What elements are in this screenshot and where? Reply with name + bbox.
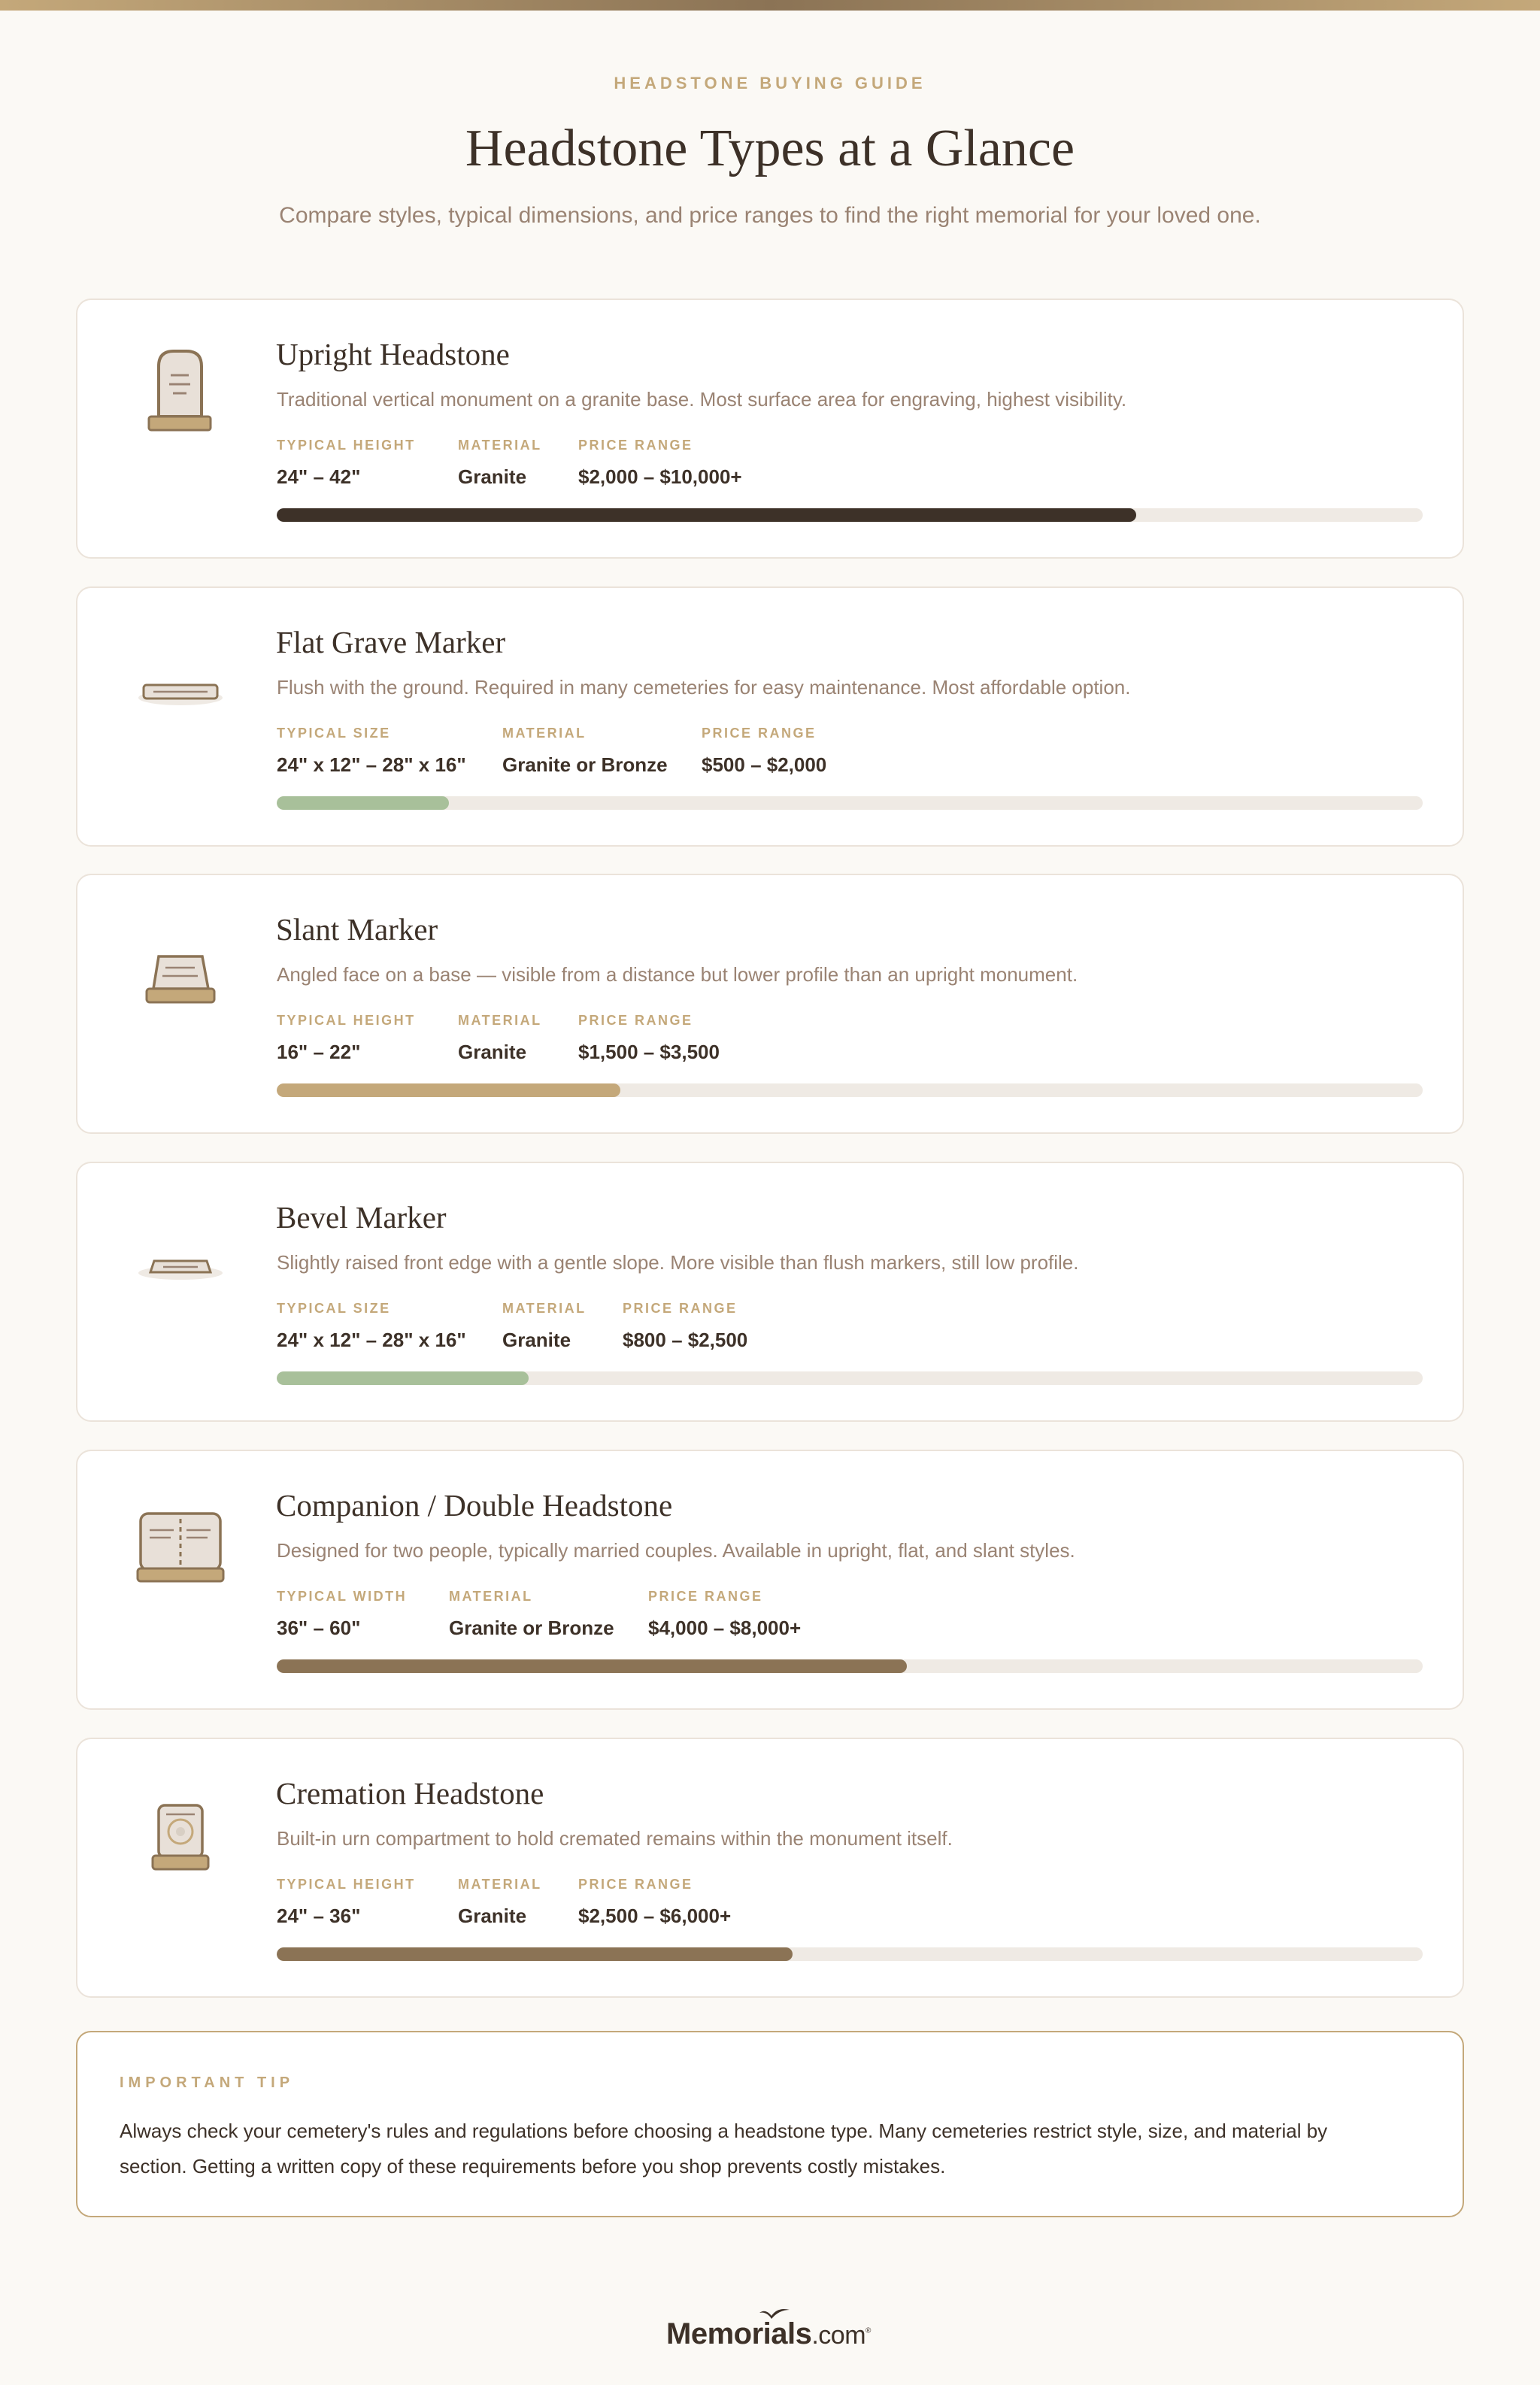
specs: $2,000 – $10,000+ bbox=[578, 465, 742, 488]
specs: $1,500 – $3,500 bbox=[578, 1041, 720, 1063]
heading: Companion / Double Headstone bbox=[276, 1488, 672, 1523]
specs bbox=[277, 1589, 801, 1639]
specs: 24" – 36" bbox=[277, 1905, 360, 1927]
specs: TYPICAL HEIGHT bbox=[277, 1877, 416, 1892]
eyebrow label: HEADSTONE BUYING GUIDE bbox=[614, 74, 926, 92]
specs: Granite bbox=[458, 1041, 526, 1063]
specs: Granite bbox=[458, 465, 526, 488]
heading: Bevel Marker bbox=[276, 1200, 447, 1235]
specs: $800 – $2,500 bbox=[623, 1329, 747, 1351]
icon: slant marker bbox=[146, 955, 215, 1003]
price bar bbox=[277, 1947, 1423, 1961]
specs bbox=[277, 438, 742, 488]
icon: flat marker bbox=[138, 684, 223, 705]
specs: PRICE RANGE bbox=[623, 1301, 738, 1316]
callout: important tip bbox=[76, 2031, 1464, 2217]
title: Headstone Types at a Glance bbox=[465, 120, 1075, 177]
top bar bbox=[0, 0, 1540, 11]
price bar bbox=[277, 508, 1423, 522]
specs: Granite bbox=[458, 1905, 526, 1927]
specs: TYPICAL HEIGHT bbox=[277, 1013, 416, 1028]
specs bbox=[277, 1877, 731, 1927]
specs bbox=[277, 726, 826, 776]
specs: PRICE RANGE bbox=[648, 1589, 763, 1604]
price bar bbox=[277, 1083, 1423, 1097]
specs: PRICE RANGE bbox=[702, 726, 817, 741]
description: Flush with the ground. Required in many cemeteries for easy maintenance. Most affordable option. bbox=[277, 676, 1130, 699]
panel: upright headstone bbox=[76, 299, 1464, 559]
description: Traditional vertical monument on a granite base. Most surface area for engraving, highest visibility. bbox=[277, 388, 1126, 411]
panel: cremation headstone bbox=[76, 1738, 1464, 1998]
specs: MATERIAL bbox=[502, 726, 587, 741]
panel: companion headstone bbox=[76, 1450, 1464, 1710]
logo: Memorials.com® bbox=[666, 2317, 871, 2350]
specs: TYPICAL SIZE bbox=[277, 1301, 391, 1316]
description: Angled face on a base — visible from a distance but lower profile than an upright monument. bbox=[277, 963, 1078, 986]
specs: PRICE RANGE bbox=[578, 438, 693, 453]
panel: bevel marker bbox=[76, 1162, 1464, 1422]
specs: $2,500 – $6,000+ bbox=[578, 1905, 731, 1927]
specs: Granite or Bronze bbox=[502, 753, 668, 776]
icon: companion headstone bbox=[137, 1512, 224, 1582]
specs: TYPICAL WIDTH bbox=[277, 1589, 407, 1604]
heading: Slant Marker bbox=[276, 912, 438, 947]
heading: Flat Grave Marker bbox=[276, 625, 505, 659]
icon: bevel marker bbox=[138, 1260, 223, 1280]
specs bbox=[277, 1013, 720, 1063]
specs: $4,000 – $8,000+ bbox=[648, 1617, 801, 1639]
icon: cremation headstone bbox=[152, 1804, 209, 1871]
tip text: Always check your cemetery's rules and regulations before choosing a headstone type. Many cemeteries restrict style, size, and material by section. Getting a written copy of these requirements before you shop prevents costly mistakes. bbox=[120, 2120, 1327, 2177]
description: Built-in urn compartment to hold cremated remains within the monument itself. bbox=[277, 1827, 953, 1850]
price bar bbox=[277, 1659, 1423, 1673]
specs: 24" x 12" – 28" x 16" bbox=[277, 1329, 466, 1351]
subtitle: Compare styles, typical dimensions, and price ranges to find the right memorial for your loved one. bbox=[279, 203, 1261, 228]
panel: flat grave marker bbox=[76, 586, 1464, 847]
specs: Granite or Bronze bbox=[449, 1617, 614, 1639]
specs: PRICE RANGE bbox=[578, 1013, 693, 1028]
description: Slightly raised front edge with a gentle slope. More visible than flush markers, still low profile. bbox=[277, 1251, 1078, 1274]
specs: MATERIAL bbox=[458, 438, 542, 453]
specs: 24" x 12" – 28" x 16" bbox=[277, 753, 466, 776]
price bar bbox=[277, 1371, 1423, 1385]
icon: bird bbox=[759, 2309, 790, 2319]
specs: TYPICAL HEIGHT bbox=[277, 438, 416, 453]
specs: TYPICAL SIZE bbox=[277, 726, 391, 741]
specs: 16" – 22" bbox=[277, 1041, 360, 1063]
specs: Granite bbox=[502, 1329, 571, 1351]
icon: upright headstone bbox=[147, 350, 212, 432]
specs: MATERIAL bbox=[458, 1877, 542, 1892]
specs: MATERIAL bbox=[458, 1013, 542, 1028]
specs bbox=[277, 1301, 747, 1351]
specs: $500 – $2,000 bbox=[702, 753, 826, 776]
specs: MATERIAL bbox=[502, 1301, 587, 1316]
price bar bbox=[277, 796, 1423, 810]
specs: 36" – 60" bbox=[277, 1617, 360, 1639]
tip label: IMPORTANT TIP bbox=[120, 2074, 294, 2091]
heading: Cremation Headstone bbox=[276, 1776, 544, 1811]
specs: MATERIAL bbox=[449, 1589, 533, 1604]
specs: 24" – 42" bbox=[277, 465, 360, 488]
panel: slant marker bbox=[76, 874, 1464, 1134]
heading: Upright Headstone bbox=[276, 337, 510, 371]
specs: PRICE RANGE bbox=[578, 1877, 693, 1892]
description: Designed for two people, typically married couples. Available in upright, flat, and slant styles. bbox=[277, 1539, 1075, 1562]
